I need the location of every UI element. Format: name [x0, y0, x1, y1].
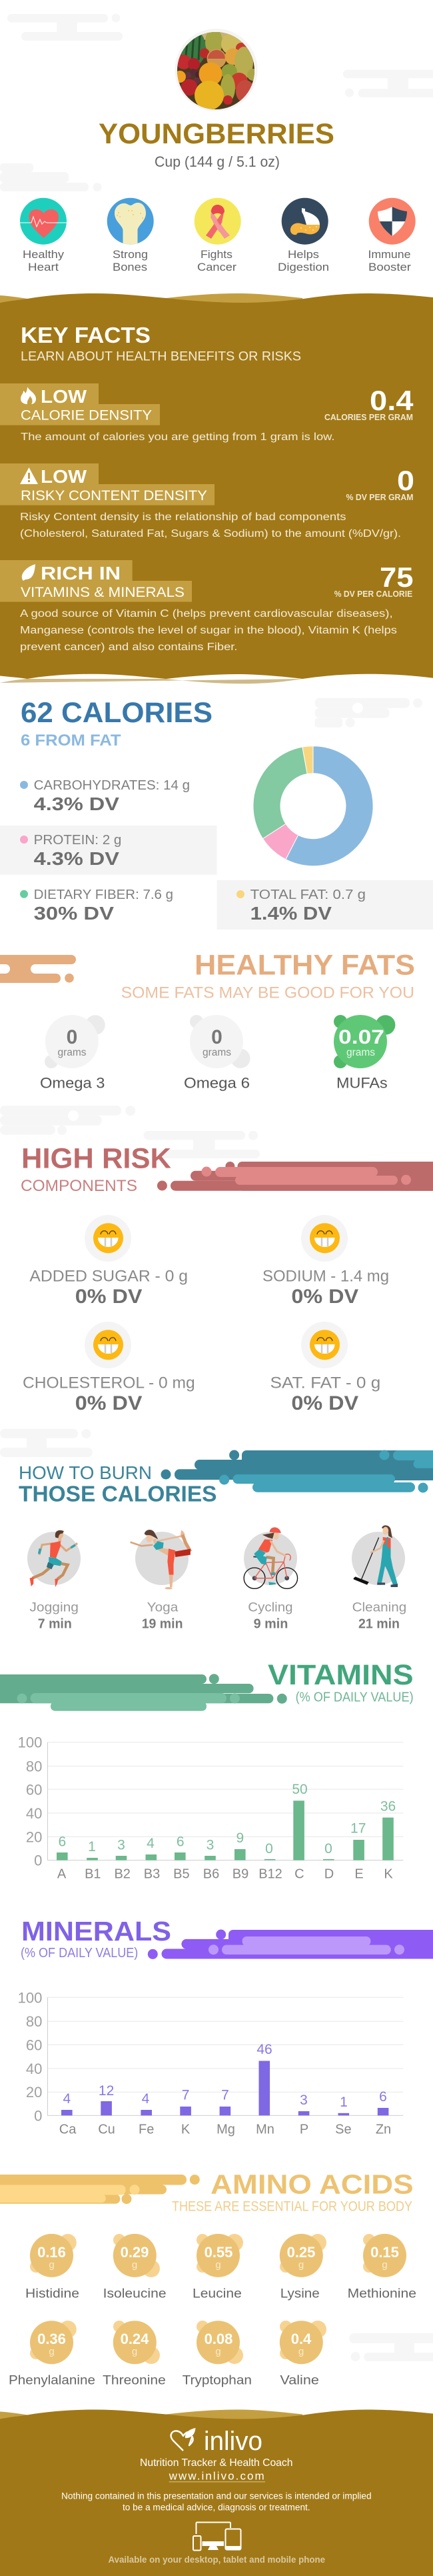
risk item: added sugar: ADDED SUGAR - 0 g: [29, 1268, 188, 1286]
label: helps digestion: Digestion: [278, 261, 329, 273]
fact: rich in vitamins and minerals: VITAMINS & MINERALS: [21, 584, 185, 600]
activity: cleaning: [352, 1525, 405, 1587]
bar chart: vitamins: 0: [265, 1841, 273, 1856]
fact: low calorie density: 0.4: [370, 385, 414, 416]
icon: immune booster: [369, 198, 416, 245]
decoration: amino acids bars: [0, 2175, 200, 2204]
amino acid: tryptophan: 0.08: [205, 2331, 232, 2347]
disclaimer: Nothing contained in this presentation and our services is intended or implied: [61, 2491, 372, 2501]
bar chart: vitamins: 6: [177, 1834, 185, 1849]
bar chart: minerals: P: [300, 2123, 308, 2137]
fact: low calorie density: LOW: [41, 386, 87, 407]
subheading: vitamins daily value: (% OF DAILY VALUE): [296, 1690, 414, 1705]
amino acid: threonine: 0.24: [121, 2331, 149, 2347]
amino acid: histidine: 0.16: [37, 2244, 66, 2261]
fact: low calorie density: CALORIES PER GRAM: [324, 413, 413, 422]
fact: rich in vitamins and minerals: % DV PER CALORIE: [334, 589, 412, 599]
risk item: sodium: SODIUM - 1.4 mg: [262, 1268, 389, 1286]
bar chart: minerals: 100: [18, 1989, 42, 2006]
label: fights cancer: Fights: [201, 249, 232, 261]
risk item: sodium: 0% DV: [291, 1286, 358, 1308]
risk item: cholesterol: CHOLESTEROL - 0 mg: [23, 1374, 195, 1392]
label: strong bones: Strong: [113, 249, 148, 261]
title: YOUNGBERRIES: [99, 118, 334, 150]
icon: flame: [21, 387, 36, 404]
label: healthy heart: [23, 249, 65, 273]
amino acid: isoleucine: 0.29: [121, 2244, 149, 2261]
tagline: Nutrition Tracker & Health Coach: [140, 2457, 293, 2469]
bar chart: minerals: 12: [99, 2083, 114, 2099]
heading: high risk: HIGH RISK: [21, 1143, 171, 1175]
activity: yoga: [131, 1530, 191, 1589]
label: jogging: [29, 1600, 79, 1632]
heading: vitamins: VITAMINS: [268, 1659, 414, 1691]
bar chart: minerals: Zn: [376, 2123, 391, 2137]
legend: protein: [0, 826, 217, 875]
bar chart: vitamins: A: [57, 1867, 67, 1882]
label: cycling: [248, 1600, 293, 1632]
bar chart: vitamins: 9: [236, 1830, 244, 1846]
stat: omega 6: grams: [203, 1047, 231, 1058]
label: healthy heart: Healthy: [23, 249, 65, 261]
stat: MUFAs: [334, 1015, 395, 1092]
bar chart: minerals: Mn: [256, 2123, 274, 2137]
bar chart: vitamins: 17: [350, 1820, 366, 1836]
bar chart: vitamins: [18, 1734, 403, 1882]
bar chart: minerals: 7: [182, 2088, 189, 2103]
bar chart: minerals: 46: [256, 2042, 272, 2057]
bar chart: minerals: [18, 1989, 403, 2137]
legend: total fat: TOTAL FAT: 0.7 g: [250, 888, 366, 902]
fact: low risky content density: % DV PER GRAM: [346, 493, 413, 502]
amino acid: lysine: [280, 2234, 326, 2301]
heading: amino acids: AMINO ACIDS: [211, 2169, 414, 2200]
label: immune booster: [368, 249, 412, 273]
bar chart: minerals: 1: [340, 2095, 348, 2110]
availability note: Available on your desktop, tablet and mobile phone: [108, 2555, 325, 2565]
icon: fights cancer: [195, 198, 241, 245]
stat: omega 3: 0: [67, 1026, 77, 1048]
logo wordmark: inlivo: [204, 2427, 262, 2456]
fact: low risky content density: 0: [397, 465, 414, 496]
bar chart: vitamins: 20: [26, 1828, 42, 1845]
amino acid: phenylalanine: 0.36: [37, 2331, 66, 2347]
risk item: added sugar: [29, 1215, 188, 1308]
risk item: cholesterol: [23, 1322, 195, 1414]
icon: healthy heart: [20, 198, 67, 245]
fact: low risky content density: [0, 463, 414, 539]
amino acid: methionine: 0.15: [370, 2244, 399, 2261]
stat: omega 3: grams: [57, 1047, 87, 1058]
fact: low risky content density: LOW: [41, 466, 87, 487]
subheading: healthy fats: SOME FATS MAY BE GOOD FOR YOU: [121, 984, 414, 1002]
fact: rich in vitamins and minerals: [0, 560, 413, 653]
amino acid: leucine: g: [215, 2259, 221, 2271]
bar chart: vitamins: B9: [232, 1867, 248, 1882]
activity: jogging: [27, 1530, 81, 1587]
label: helps digestion: Helps: [288, 249, 319, 261]
bar chart: minerals: K: [181, 2123, 191, 2137]
amino acid: valine: [280, 2321, 326, 2388]
bar chart: minerals: Fe: [139, 2123, 154, 2137]
amino acid: leucine: [193, 2234, 243, 2301]
bar chart: minerals: Se: [335, 2123, 352, 2137]
bar chart: minerals: 6: [379, 2089, 387, 2105]
bar chart: vitamins: E: [354, 1867, 364, 1882]
legend: protein: PROTEIN: 2 g: [34, 833, 121, 848]
icon: leaf: [22, 564, 35, 581]
bar chart: vitamins: B2: [114, 1867, 131, 1882]
bar chart: minerals: 80: [26, 2013, 42, 2030]
amino acid: isoleucine: g: [132, 2259, 137, 2271]
amino acid: histidine: Histidine: [25, 2287, 79, 2301]
legend: carbohydrates: CARBOHYDRATES: 14 g: [34, 778, 190, 793]
legend: dietary fiber: 30% DV: [34, 903, 114, 924]
amino acid: tryptophan: Tryptophan: [183, 2374, 252, 2388]
label: immune booster: Booster: [368, 261, 412, 273]
fact: low risky content density: (Cholesterol, Saturated Fat, Sugars & Sodium) to the amount (%DV/gr).: [20, 528, 401, 539]
bar chart: vitamins: B3: [144, 1867, 160, 1882]
decoration: minerals bars: [148, 1930, 433, 1959]
amino acid: leucine: 0.55: [205, 2244, 232, 2261]
amino acid: methionine: g: [382, 2259, 388, 2271]
bar chart: vitamins: B6: [203, 1867, 219, 1882]
amino acid: phenylalanine: [9, 2321, 95, 2388]
amino acid: isoleucine: Isoleucine: [103, 2287, 167, 2301]
amino acid: isoleucine: [103, 2234, 167, 2301]
legend: dietary fiber: [20, 888, 173, 924]
legend: total fat: 1.4% DV: [250, 903, 332, 924]
amino acid: histidine: [25, 2234, 79, 2301]
heading: key facts: KEY FACTS: [21, 323, 151, 347]
icon: helps digestion: [282, 198, 328, 245]
bar chart: vitamins: 3: [207, 1837, 214, 1852]
decoration: vitamins bars: [0, 1674, 287, 1711]
bar chart: minerals: Cu: [98, 2123, 115, 2137]
bar chart: vitamins: 36: [380, 1799, 396, 1814]
bar chart: vitamins: 0: [34, 1852, 42, 1869]
bar chart: vitamins: B12: [258, 1867, 282, 1882]
fact: low risky content density: Risky Content density is the relationship of bad components: [20, 511, 346, 523]
heading: those calories: THOSE CALORIES: [19, 1482, 217, 1506]
fact: rich in vitamins and minerals: prevent cancer) and also contains Fiber.: [20, 641, 237, 653]
bar chart: minerals: 4: [142, 2091, 150, 2107]
amino acid: phenylalanine: g: [49, 2346, 55, 2357]
heading: minerals: MINERALS: [21, 1916, 171, 1947]
bar chart: minerals: Ca: [59, 2123, 77, 2137]
stat: omega 6: Omega 6: [184, 1075, 250, 1092]
donut chart: macronutrients: [253, 746, 373, 866]
fact: low calorie density: CALORIE DENSITY: [21, 407, 152, 423]
legend: protein: 4.3% DV: [34, 848, 119, 869]
amino acid: lysine: g: [298, 2259, 304, 2271]
decoration: burn calories bars: [161, 1450, 433, 1492]
bar chart: vitamins: K: [384, 1867, 393, 1882]
risk item: saturated fat: [270, 1322, 380, 1414]
stat: MUFAs: 0.07: [338, 1026, 384, 1048]
legend: carbohydrates: 4.3% DV: [34, 794, 119, 814]
label: yoga: 19 min: [142, 1617, 183, 1632]
legend: dietary fiber: DIETARY FIBER: 7.6 g: [34, 888, 173, 902]
decoration: healthy fats bars: [0, 955, 84, 983]
bar chart: minerals: 40: [26, 2061, 42, 2077]
bar chart: vitamins: C: [294, 1867, 304, 1882]
bar chart: minerals: 3: [300, 2093, 308, 2108]
amino acid: methionine: [348, 2234, 416, 2301]
label: yoga: [142, 1600, 183, 1632]
bar chart: minerals: 0: [34, 2107, 42, 2124]
label: healthy heart: Heart: [28, 261, 59, 273]
bar chart: vitamins: 0: [324, 1841, 332, 1856]
amino acid: methionine: Methionine: [348, 2287, 416, 2301]
label: helps digestion: [278, 249, 329, 273]
label: cycling: 9 min: [254, 1617, 288, 1632]
amino acid: tryptophan: g: [215, 2346, 221, 2357]
amino acid: histidine: g: [49, 2259, 55, 2271]
disclaimer: to be a medical advice, diagnosis or treatment.: [123, 2502, 310, 2512]
risk item: cholesterol: 0% DV: [75, 1392, 143, 1414]
icon: devices: [193, 2522, 241, 2550]
label: jogging: 7 min: [38, 1617, 72, 1632]
bar chart: minerals: 20: [26, 2084, 42, 2101]
fact: rich in vitamins and minerals: Manganese (controls the level of sugar in the blood), Vitamin K (helps: [20, 625, 397, 636]
amino acid: lysine: Lysine: [280, 2287, 320, 2301]
subheading: components: COMPONENTS: [21, 1177, 137, 1195]
label: strong bones: Bones: [113, 261, 147, 273]
label: cleaning: 21 min: [358, 1617, 400, 1632]
label: cycling: Cycling: [248, 1600, 293, 1615]
bar chart: vitamins: 4: [147, 1836, 155, 1851]
bar chart: vitamins: B5: [173, 1867, 190, 1882]
bar chart: vitamins: 3: [117, 1837, 125, 1852]
bar chart: vitamins: 1: [88, 1839, 96, 1854]
fact: rich in vitamins and minerals: RICH IN: [41, 563, 121, 583]
label: fights cancer: Cancer: [197, 261, 237, 273]
stat: omega 6: [184, 1015, 250, 1092]
stat: MUFAs: MUFAs: [336, 1075, 388, 1092]
bar chart: minerals: 7: [221, 2088, 229, 2103]
legend: total fat: [217, 880, 433, 930]
bar chart: vitamins: 60: [26, 1781, 42, 1798]
bar chart: vitamins: 40: [26, 1805, 42, 1822]
stat: omega 6: 0: [211, 1026, 222, 1048]
activity: cycling: [244, 1527, 298, 1588]
risk item: added sugar: 0% DV: [75, 1286, 143, 1308]
fact: low calorie density: The amount of calories you are getting from 1 gram is low.: [21, 431, 334, 443]
bar chart: vitamins: 80: [26, 1758, 42, 1774]
label: fights cancer: [197, 249, 237, 273]
risk item: saturated fat: SAT. FAT - 0 g: [270, 1374, 380, 1392]
label: strong bones: [113, 249, 148, 273]
icon: warning triangle: [20, 467, 38, 484]
stat: omega 3: [40, 1015, 105, 1092]
heading: calories: 62 CALORIES: [21, 697, 213, 729]
amino acid: leucine: Leucine: [193, 2287, 242, 2301]
fact: rich in vitamins and minerals: A good source of Vitamin C (helps prevent cardiovascular diseases),: [20, 608, 393, 619]
stat: omega 3: Omega 3: [40, 1075, 105, 1092]
website link: www.inlivo.com: [169, 2470, 264, 2483]
serving size: Cup (144 g / 5.1 oz): [155, 153, 280, 170]
label: jogging: Jogging: [29, 1600, 79, 1615]
bar chart: vitamins: D: [324, 1867, 334, 1882]
icon: strong bones: [107, 198, 154, 245]
stat: MUFAs: grams: [346, 1047, 375, 1058]
bar chart: vitamins: B1: [85, 1867, 101, 1882]
label: yoga: Yoga: [147, 1600, 179, 1615]
disclaimer: [61, 2491, 372, 2512]
fact: low risky content density: RISKY CONTENT DENSITY: [21, 487, 207, 503]
subheading: key facts: LEARN ABOUT HEALTH BENEFITS OR RISKS: [21, 349, 301, 364]
bar chart: minerals: 4: [63, 2091, 71, 2107]
bar chart: vitamins: 100: [18, 1734, 42, 1751]
risk item: saturated fat: 0% DV: [291, 1392, 358, 1414]
food photo: mixed fruit: [173, 27, 259, 112]
bar chart: vitamins: 6: [58, 1834, 66, 1849]
amino acid: threonine: g: [132, 2346, 137, 2357]
panel: footer: [0, 2410, 433, 2576]
panel: key facts: [0, 293, 433, 684]
amino acid: valine: g: [298, 2346, 304, 2357]
subheading: calories from fat: 6 FROM FAT: [21, 732, 121, 750]
amino acid: valine: Valine: [280, 2374, 319, 2388]
amino acid: tryptophan: [183, 2321, 252, 2388]
amino acid: threonine: [103, 2321, 166, 2388]
label: cleaning: [352, 1600, 406, 1632]
label: immune booster: Immune: [368, 249, 410, 261]
label: cleaning: Cleaning: [352, 1600, 406, 1615]
bar chart: minerals: Mg: [217, 2123, 235, 2137]
amino acid: lysine: 0.25: [287, 2244, 315, 2261]
risk item: sodium: [262, 1215, 389, 1308]
subheading: minerals daily value: (% OF DAILY VALUE): [21, 1946, 138, 1961]
legend: carbohydrates: [20, 778, 190, 814]
bar chart: vitamins: 50: [292, 1782, 308, 1797]
decoration: high risk bars: [157, 1162, 433, 1191]
fact: low calorie density: [0, 383, 414, 443]
bar chart: minerals: 60: [26, 2037, 42, 2053]
amino acid: threonine: Threonine: [103, 2374, 166, 2388]
amino acid: phenylalanine: Phenylalanine: [9, 2374, 95, 2388]
fact: rich in vitamins and minerals: 75: [380, 561, 413, 593]
logo: heart and leaf: [171, 2428, 196, 2451]
heading: healthy fats: HEALTHY FATS: [195, 950, 415, 982]
heading: how to burn: HOW TO BURN: [19, 1462, 152, 1483]
amino acid: valine: 0.4: [291, 2331, 312, 2347]
